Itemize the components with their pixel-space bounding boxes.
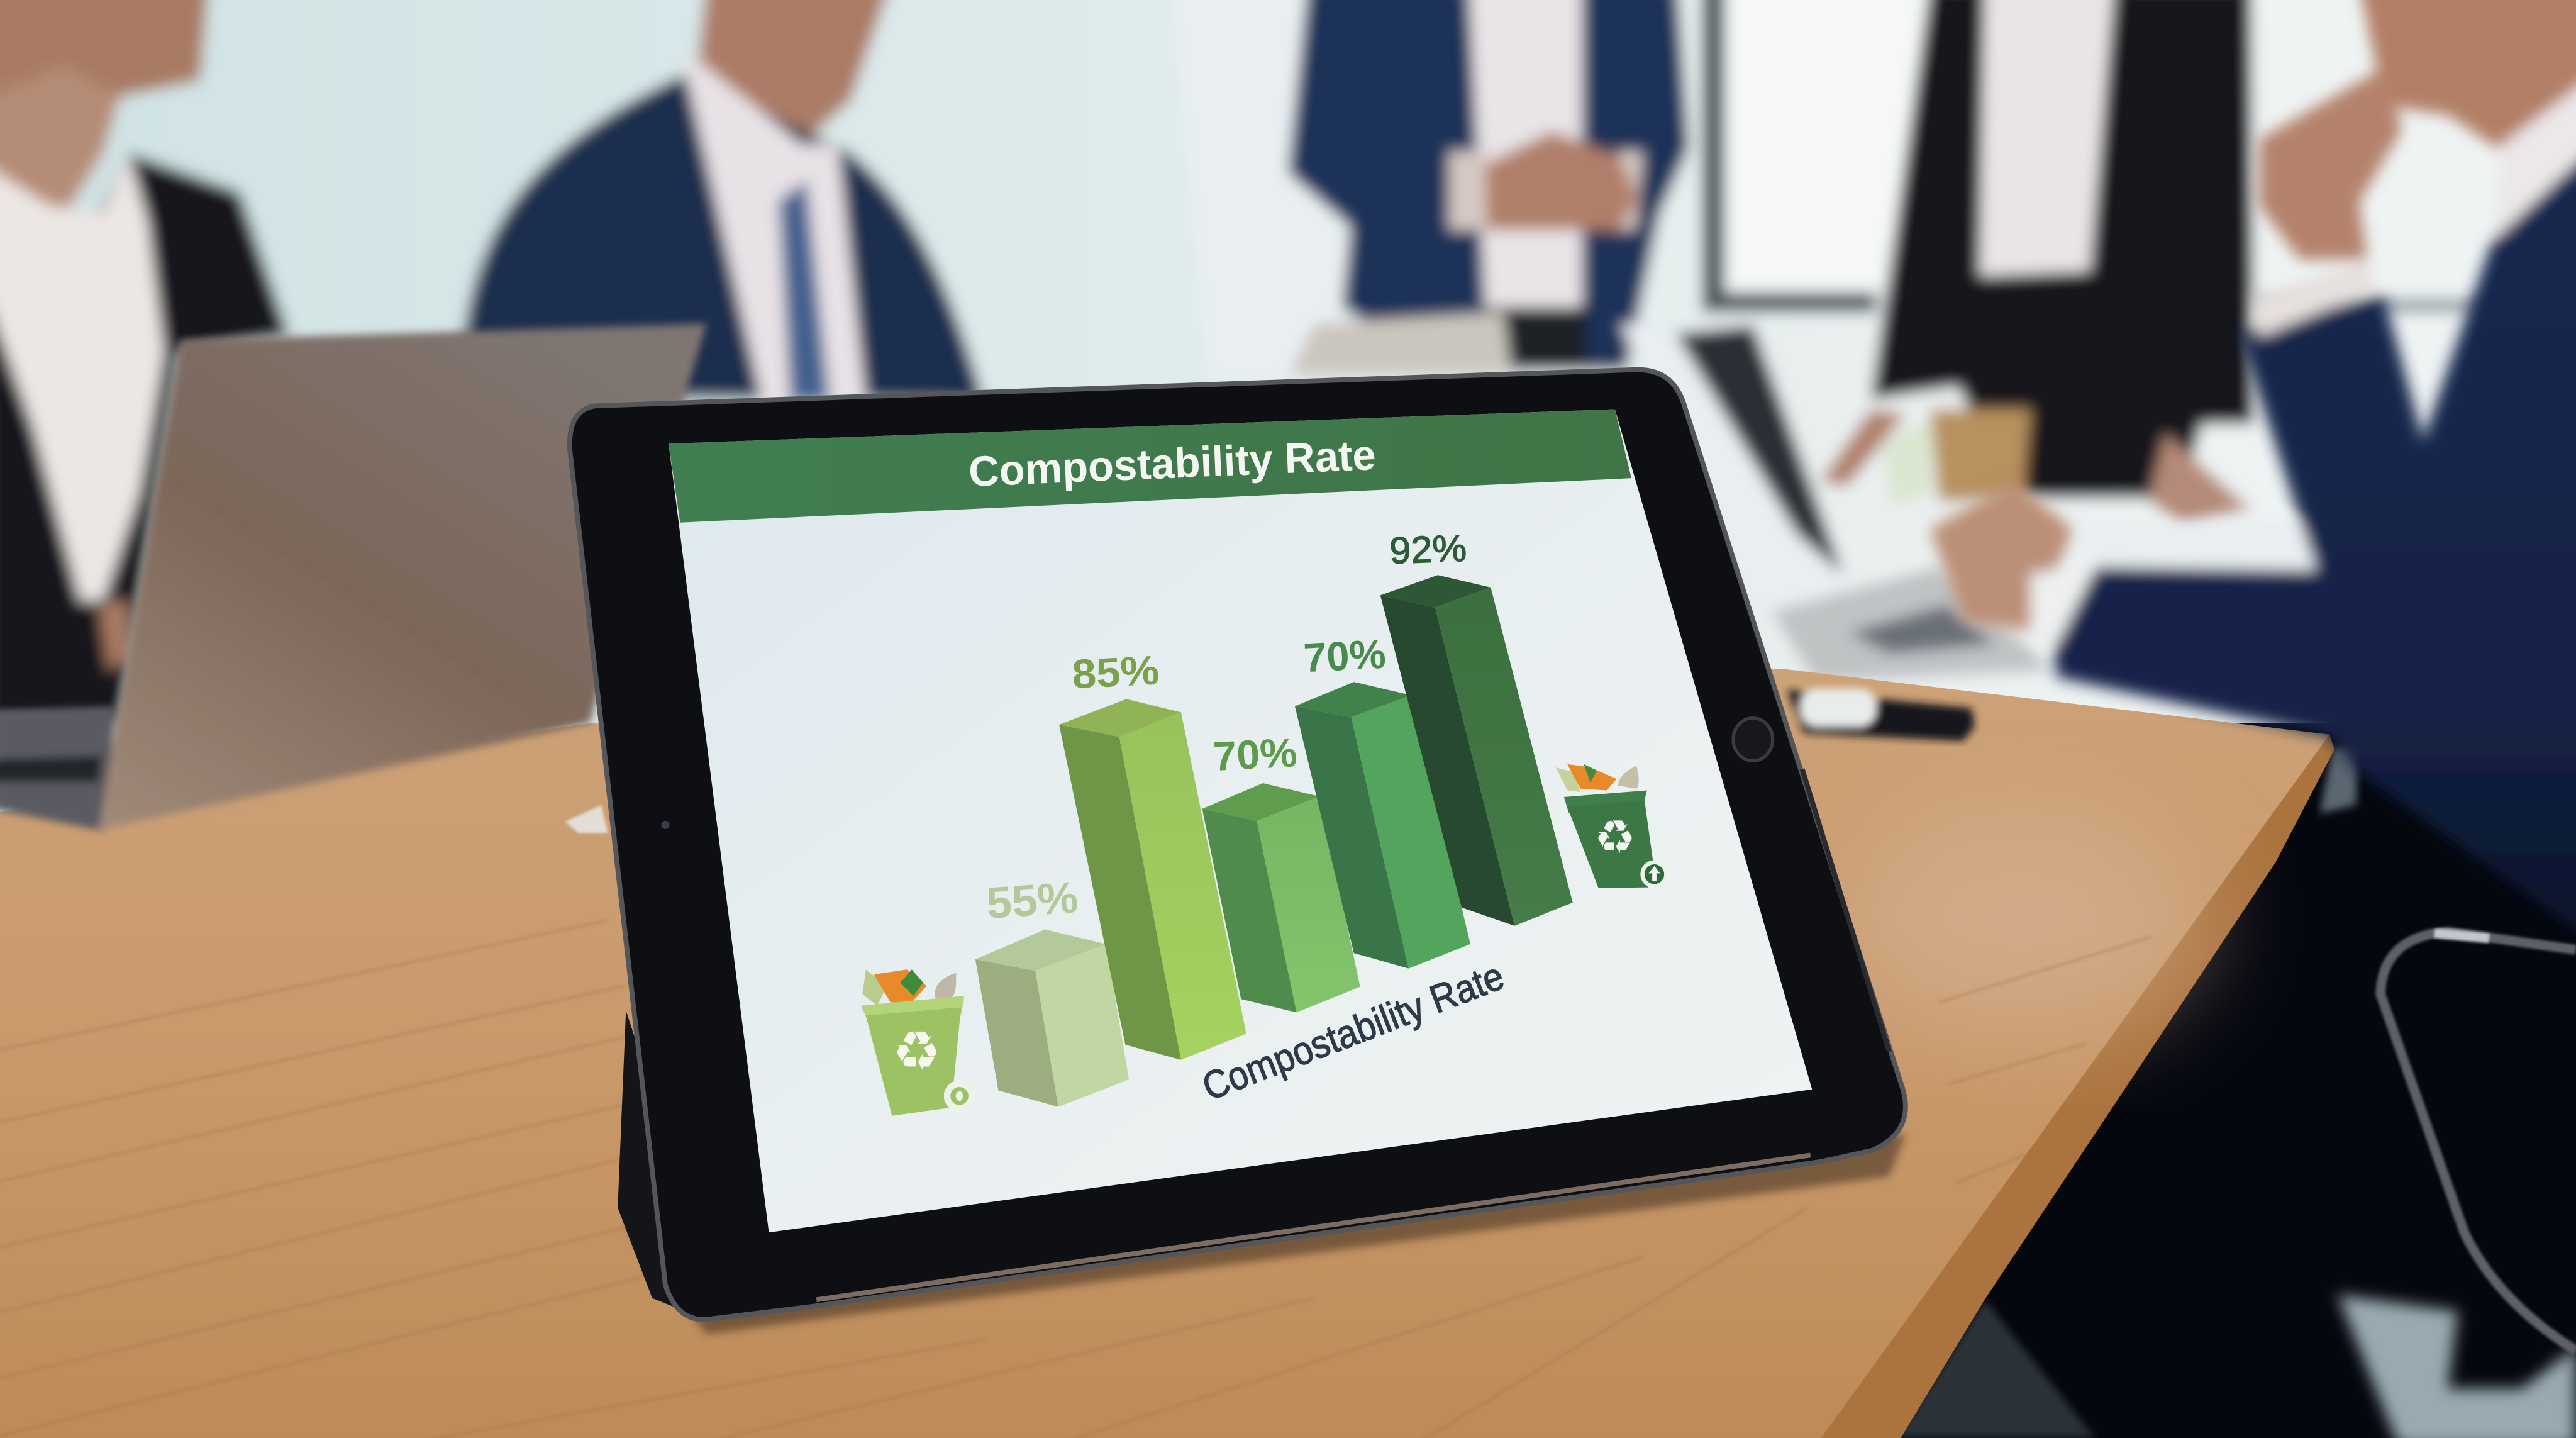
bin: light green: [861, 969, 975, 1116]
chair highlight: [2434, 934, 2489, 939]
food scraps: [862, 969, 956, 1006]
laptop at right: [1620, 324, 2053, 682]
recycle symbol: ♻: [892, 1020, 941, 1083]
bar: 55%: [975, 929, 1129, 1107]
label: 85%: 85%: [1071, 647, 1160, 698]
home button: [1733, 718, 1773, 761]
bin: dark green: [1556, 764, 1668, 888]
status badge: [1640, 861, 1668, 888]
raised hand: [2259, 67, 2402, 260]
person: woman at left: [0, 0, 289, 723]
coffee cup: [1930, 409, 2031, 501]
person: seated man: [458, 0, 984, 403]
small white object on table: [565, 805, 608, 833]
recycle symbol: ♻: [1594, 811, 1636, 864]
bronze bottom edge: [816, 1155, 1811, 1300]
label: 70% second: 70%: [1302, 631, 1387, 681]
table top: [0, 669, 2334, 1438]
window behind right person: [2254, 0, 2514, 435]
foreground man at right: [1930, 0, 2576, 945]
laptop base: [0, 706, 115, 832]
background: blurred office: [0, 0, 2576, 822]
jacket: [2053, 140, 2576, 945]
bar: 92%: [1380, 575, 1573, 926]
light reflection on wood: [1840, 805, 2201, 1035]
face: [2359, 0, 2576, 151]
chair: [2380, 932, 2576, 1351]
collar: [2494, 74, 2576, 240]
bar: 70% second: [1295, 682, 1470, 969]
lower hand: [1930, 481, 2074, 631]
side button: [1802, 769, 1889, 1052]
tablet body: [570, 370, 1906, 1320]
tablet shadow: [625, 1134, 1906, 1334]
screen: [669, 409, 1812, 1232]
bar: 70%: [1202, 783, 1360, 1012]
food scraps: [1556, 764, 1639, 792]
window frame: [1702, 0, 1876, 312]
person: standing man in centre: [1288, 0, 1689, 370]
keyboard: [0, 756, 102, 782]
floor corner: [2338, 1295, 2576, 1438]
camera dot: [661, 821, 669, 829]
label: 55%: 55%: [984, 872, 1080, 928]
table side edge: [1807, 735, 2334, 1438]
wood grain: [0, 920, 2152, 1438]
tablet: [570, 370, 1906, 1320]
label: 92%: 92%: [1389, 527, 1467, 572]
header band: [669, 409, 1631, 523]
label: 70%: 70%: [1212, 729, 1298, 779]
lower cuff: [2031, 564, 2098, 644]
table leg glimpse: [2319, 743, 2359, 813]
bar: 85%: [1059, 699, 1246, 1060]
whiteboard: [1170, 0, 1355, 381]
axis label: Compostability Rate: [1197, 954, 1510, 1109]
person: standing figure in black: [1820, 0, 2254, 524]
dark area under the table: [1807, 723, 2576, 1438]
tablet stand: [618, 1011, 709, 1308]
carpet under table: [1896, 1300, 2095, 1438]
phone on table: [1787, 689, 1975, 741]
laptop at left: [0, 324, 706, 832]
status badge: [944, 1081, 975, 1112]
laptop lid: [99, 324, 706, 830]
cuff: [2249, 260, 2375, 337]
papers: [2074, 523, 2316, 570]
greenery through the window: [1881, 419, 1932, 506]
title: Compostability Rate: [968, 432, 1377, 496]
small laptop behind tablet: [1290, 312, 1511, 375]
